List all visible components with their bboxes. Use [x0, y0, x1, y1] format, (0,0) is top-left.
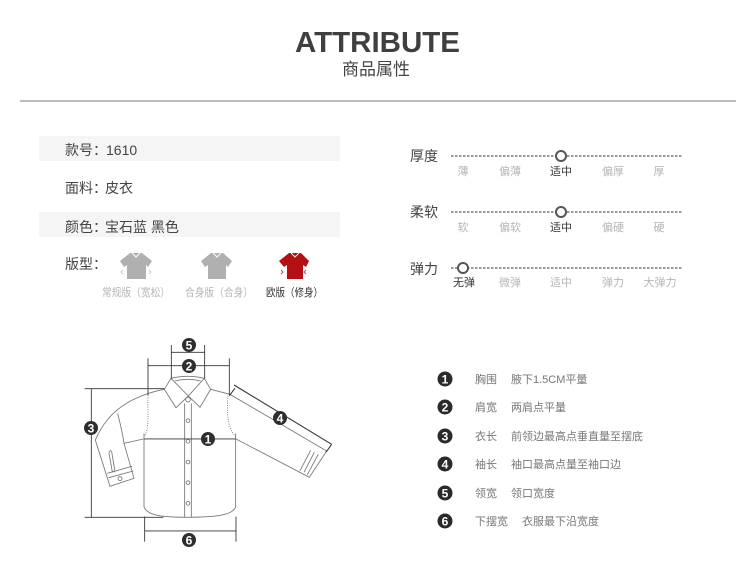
icon: standard fit shirt: [201, 253, 232, 279]
row: fit type: [65, 253, 323, 299]
item 6: [438, 514, 599, 528]
panel: softness scale: [410, 204, 682, 234]
badge 2: [182, 359, 196, 374]
badge 5: 5: [186, 338, 193, 352]
item 6: 6: [442, 514, 449, 528]
badge 6: 6: [186, 534, 193, 548]
panel: softness scale: 软: [458, 220, 468, 234]
panel: elasticity scale: 适中: [550, 276, 572, 289]
row: fit type: 版型：: [65, 256, 107, 272]
panel: elasticity scale: [410, 261, 682, 289]
badge 4: [273, 411, 287, 426]
item 2: 肩宽: [475, 400, 497, 414]
item 6: 下摆宽: [475, 514, 508, 528]
item 5: 领宽: [475, 486, 497, 500]
panel: elasticity scale: 弹力: [410, 261, 438, 277]
title: ATTRIBUTE: [295, 27, 460, 59]
badge 1: 1: [205, 432, 212, 446]
panel: elasticity scale: 微弹: [499, 275, 521, 289]
row: colour: 宝石蓝 黑色: [105, 219, 179, 235]
panel: softness scale: 柔软: [410, 204, 438, 220]
row: material: 面料：: [65, 180, 107, 196]
row: style number: 1610: [106, 142, 137, 158]
item 6: 衣服最下沿宽度: [522, 514, 599, 528]
panel: thickness scale: 偏薄: [499, 164, 521, 178]
legend: measurement guide: [438, 372, 643, 528]
label: standard fit: 合身版（合身）: [185, 285, 253, 299]
measurement lines: [85, 345, 332, 542]
item 2: 两肩点平量: [511, 400, 566, 414]
item 5: 领口宽度: [511, 486, 555, 500]
panel: thickness scale: [410, 148, 682, 178]
row: style number: 款号：: [65, 142, 107, 158]
item 1: [438, 372, 587, 386]
badge 3: [84, 421, 98, 436]
panel: elasticity scale: 弹力: [602, 275, 624, 289]
item 3: 3: [442, 430, 449, 444]
panel: softness scale: 硬: [654, 221, 664, 234]
panel: softness scale: 偏软: [499, 220, 521, 234]
label: slim fit: 欧版（修身）: [266, 285, 323, 299]
badge 3: 3: [88, 422, 95, 436]
panel: thickness scale: 厚: [654, 165, 664, 178]
panel: thickness scale: 偏厚: [602, 164, 624, 178]
item 4: 袖口最高点量至袖口边: [511, 457, 621, 471]
panel: softness scale: 适中: [550, 221, 572, 234]
badge 2: 2: [186, 360, 193, 374]
badge 6: [182, 533, 196, 548]
panel: product details: [39, 136, 340, 299]
panel: thickness scale: 厚度: [410, 148, 438, 164]
badge 1: [201, 432, 215, 446]
item 5: 5: [442, 486, 449, 500]
item 4: 袖长: [475, 457, 497, 471]
panel: thickness scale: 薄: [458, 164, 468, 178]
badge 4: 4: [277, 412, 284, 426]
title: 商品属性: [342, 60, 410, 79]
panel: softness scale: 偏硬: [602, 220, 624, 234]
item 4: [438, 456, 621, 472]
item 1: 腋下1.5CM平量: [511, 372, 587, 386]
badge 5: [182, 338, 196, 352]
item 4: 4: [442, 458, 449, 472]
item 3: 衣长: [475, 429, 497, 443]
row: colour: 颜色：: [65, 219, 107, 235]
row: style number: [39, 136, 340, 161]
title: [295, 27, 460, 79]
item 2: [438, 400, 566, 414]
label: regular fit: 常规版（宽松）: [102, 285, 170, 299]
icon: slim fit shirt: [279, 253, 309, 279]
row: material: [65, 180, 133, 196]
panel: elasticity scale: 无弹: [453, 275, 475, 289]
item 3: 前领边最高点垂直量至摆底: [511, 429, 643, 443]
shirt outline: [95, 376, 327, 517]
item 1: 1: [442, 372, 449, 386]
item 3: [438, 428, 643, 444]
item 5: [438, 486, 555, 500]
icon: regular fit shirt: [120, 253, 152, 279]
item 2: 2: [442, 400, 449, 414]
diagram: shirt measurements: [84, 338, 332, 548]
panel: thickness scale: 适中: [550, 165, 572, 178]
panel: elasticity scale: 大弹力: [644, 275, 676, 289]
row: colour: [39, 212, 340, 237]
item 1: 胸围: [475, 372, 497, 386]
row: material: 皮衣: [105, 180, 133, 196]
